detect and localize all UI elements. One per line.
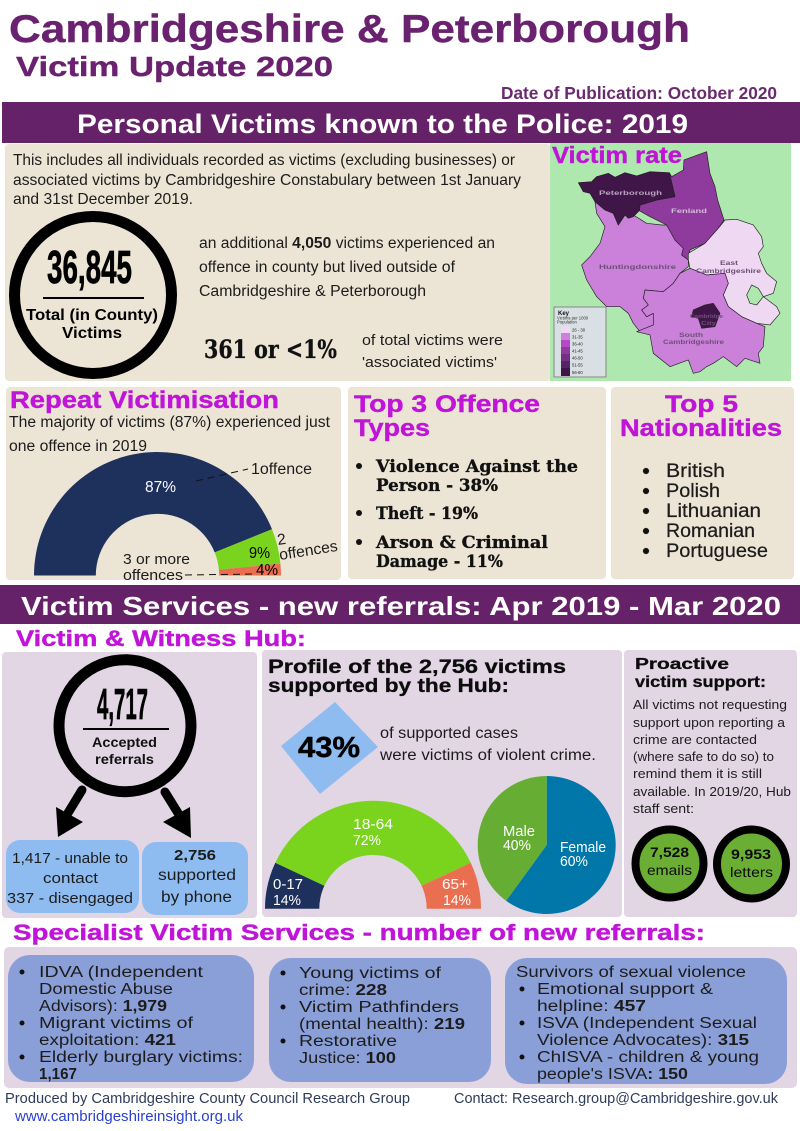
associated victims stat: 361 or <1% [204, 335, 337, 364]
box: young victims and pathfinders [269, 958, 491, 1082]
map key: 31-35 [572, 334, 583, 340]
proactive text: support upon reporting a [633, 716, 785, 730]
banner: personal victims [2, 102, 800, 143]
proactive text: crime are contacted [633, 733, 757, 747]
age half-donut chart: 18-64 [353, 817, 393, 833]
top 3 heading: Top 3 Offence [354, 391, 540, 418]
gender pie chart [478, 776, 616, 914]
intro text: This includes all individuals recorded as victims (excluding businesses) or [13, 152, 516, 169]
additional victims text: an additional 4,050 victims experienced an [199, 235, 495, 252]
box: domestic abuse and exploitation: Advisors): 1,979 [39, 998, 167, 1015]
title block: Victim Update 2020 [16, 51, 333, 82]
map labels: Cambridgeshire [663, 339, 724, 346]
offence list [356, 457, 578, 572]
age half-donut chart: 14% [443, 893, 471, 909]
box: domestic abuse and exploitation: Domestic Abuse [39, 981, 173, 998]
nationalities heading [620, 391, 782, 442]
panel: personal victims summary [5, 144, 551, 381]
intro text [13, 152, 521, 208]
associated victims stat: of total victims were [362, 332, 503, 349]
box: domestic abuse and exploitation: exploitation: 421 [39, 1032, 176, 1049]
total victims ring: Victims [62, 325, 122, 342]
map labels: Cambridgeshire [696, 268, 761, 275]
repeat victimisation text [9, 414, 331, 455]
callout: unable to contact: 1,417 - unable to [12, 850, 128, 867]
callout: supported by phone [142, 842, 248, 915]
map key: 56-60 [572, 370, 583, 375]
proactive text: available. In 2019/20, Hub [633, 785, 791, 799]
letters count: letters [730, 864, 773, 880]
box: survivors of sexual violence: Emotional support & [537, 981, 714, 998]
panel: proactive victim support [624, 650, 797, 917]
top 3 heading: Types [354, 415, 430, 442]
map key: Key [558, 311, 570, 317]
map key: Population [557, 320, 577, 324]
box: domestic abuse and exploitation: IDVA (Independent [39, 964, 204, 981]
repeat victimisation heading: Repeat Victimisation [10, 387, 279, 414]
repeat victimisation text: The majority of victims (87%) experienced just [9, 414, 331, 431]
age half-donut chart: 14% [273, 893, 301, 909]
offence list: Damage - 11% [376, 552, 503, 572]
nationalities list: Romanian [666, 520, 755, 542]
box: young victims and pathfinders: Restorative [299, 1033, 397, 1050]
half-donut chart: offence counts: offences [278, 538, 339, 564]
violent crime stat: of supported cases [380, 725, 518, 742]
half-donut chart: offence counts [34, 452, 339, 584]
intro text: and 31st December 2019. [13, 191, 193, 208]
map labels: Huntingdonshire [599, 264, 677, 271]
nationalities list: Portuguese [666, 540, 768, 562]
callout: unable to contact [6, 840, 139, 913]
profile heading: supported by the Hub: [268, 676, 509, 697]
nationalities list: British [666, 460, 725, 482]
arrow: to unable to contact [56, 790, 83, 837]
panel: profile of supported victims [262, 650, 622, 917]
heading: victim and witness hub: Victim & Witness Hub: [16, 626, 306, 651]
half-donut chart: offence counts: 1offence [251, 461, 312, 478]
intro text: associated victims by Cambridgeshire Constabulary between 1st January [13, 172, 521, 189]
nationalities heading: Nationalities [620, 415, 782, 442]
proactive text: (where safe to do so) to [633, 750, 774, 764]
top 3 heading [354, 391, 540, 442]
panel: repeat victimisation [6, 387, 341, 584]
victim rate heading: Victim rate [552, 142, 682, 168]
violent crime stat: were victims of violent crime. [379, 747, 596, 764]
emails count [636, 830, 704, 898]
proactive heading: Proactive [635, 656, 729, 673]
map key: 46-50 [572, 356, 583, 360]
box: young victims and pathfinders: crime: 228 [299, 982, 387, 999]
banner: victim services [0, 585, 800, 624]
half-donut chart: offence counts: 3 or more [123, 551, 190, 568]
associated victims stat [204, 332, 503, 371]
box: survivors of sexual violence: helpline: 457 [537, 998, 646, 1015]
box: young victims and pathfinders: Young victims of [299, 965, 442, 982]
age half-donut chart: 0-17 [273, 877, 303, 893]
box: domestic abuse and exploitation: 1,167 [39, 1066, 77, 1083]
title block: Cambridgeshire & Peterborough [9, 8, 690, 51]
total victims ring: Total (in County) [26, 307, 158, 324]
panel: specialist services [4, 947, 797, 1088]
panel: top 5 nationalities [611, 387, 794, 579]
age half-donut chart: 65+ [442, 877, 468, 893]
box: survivors of sexual violence: ISVA (Independent Sexual [537, 1015, 757, 1032]
footer: Contact: Research.group@Cambridgeshire.gov.uk [454, 1091, 779, 1107]
half-donut chart: offence counts: 4% [256, 562, 278, 579]
banner: personal victims: Personal Victims known to the Police: 2019 [77, 109, 688, 139]
nationalities heading: Top 5 [665, 391, 738, 418]
gender pie chart: 60% [560, 854, 588, 870]
panel: top 3 offence types [348, 387, 606, 579]
footer: www.cambridgeshireinsight.org.uk [14, 1109, 244, 1125]
box: young victims and pathfinders: (mental health): 219 [299, 1016, 465, 1033]
emails count: 7,528 [650, 844, 689, 860]
map labels: Cambridge [690, 314, 723, 320]
heading: specialist victim services: Specialist Victim Services - number of new referrals: [13, 920, 705, 945]
accepted referrals ring: 4,717 [97, 680, 148, 729]
letters count [717, 830, 786, 898]
box: survivors of sexual violence: ChISVA - children & young [537, 1049, 759, 1066]
map labels: Fenland [671, 208, 707, 215]
footer: Produced by Cambridgeshire County Council Research Group [5, 1091, 410, 1107]
additional victims text: Cambridgeshire & Peterborough [199, 283, 426, 300]
panel: hub referrals [2, 652, 257, 918]
box: survivors of sexual violence: Survivors of sexual violence [516, 964, 746, 981]
box: domestic abuse and exploitation [8, 955, 254, 1083]
age half-donut chart [265, 801, 481, 909]
associated victims stat: 'associated victims' [362, 354, 497, 371]
callout: supported by phone: by phone [161, 889, 232, 906]
gender pie chart: Male [503, 824, 535, 840]
banner: victim services: Victim Services - new referrals: Apr 2019 - Mar 2020 [21, 591, 781, 621]
box: domestic abuse and exploitation: Elderly burglary victims: [39, 1049, 243, 1066]
offence list: Arson & Criminal [375, 533, 549, 553]
footer [5, 1091, 779, 1125]
map key: 51-55 [572, 362, 583, 368]
profile heading [268, 657, 566, 697]
map labels: City [701, 321, 717, 327]
map key: 26 - 30 [572, 328, 586, 332]
callout: unable to contact: contact [43, 870, 99, 887]
proactive text: All victims not requesting [633, 698, 787, 712]
callout: unable to contact: 337 - disengaged [7, 890, 133, 907]
publication date: Date of Publication: October 2020 [501, 83, 777, 103]
map key: Victims per 1000 [557, 316, 589, 320]
map key: 41-45 [572, 348, 583, 354]
total victims ring: 36,845 [47, 241, 132, 293]
additional victims text [199, 235, 495, 300]
title block [9, 8, 690, 82]
nationalities list: Lithuanian [666, 500, 761, 522]
map labels: South [679, 332, 703, 339]
gender pie chart: Female [560, 840, 606, 856]
accepted referrals ring: referrals [95, 751, 154, 767]
violent crime stat [281, 702, 596, 794]
panel: victim rate map [550, 142, 791, 381]
box: survivors of sexual violence: people's ISVA : 150 [537, 1066, 688, 1083]
nationalities list: Polish [666, 480, 720, 502]
proactive text: remind them it is still [633, 767, 762, 781]
profile heading: Profile of the 2,756 victims [268, 657, 566, 678]
half-donut chart: offence counts: 87% [145, 479, 176, 496]
violent crime stat: 43% [298, 732, 360, 764]
proactive heading: victim support: [635, 674, 766, 691]
offence list: Theft - 19% [376, 504, 478, 524]
repeat victimisation text: one offence in 2019 [9, 438, 147, 455]
box: young victims and pathfinders: Justice: 100 [299, 1050, 396, 1067]
map labels [599, 190, 761, 346]
nationalities list [643, 460, 768, 562]
box: young victims and pathfinders: Victim Pathfinders [299, 999, 459, 1016]
proactive text [633, 698, 791, 816]
half-donut chart: offence counts: 9% [249, 545, 270, 562]
half-donut chart: offence counts: offences [123, 567, 183, 584]
total victims ring [14, 216, 172, 374]
additional victims text: offence in county but lived outside of [199, 259, 456, 276]
offence list: Person - 38% [376, 476, 498, 496]
map labels: East [720, 260, 739, 267]
map key [554, 307, 606, 377]
age half-donut chart: 72% [353, 833, 381, 849]
map labels: Peterborough [599, 190, 662, 197]
map key: 36-40 [572, 342, 583, 346]
callout: supported by phone: 2,756 [174, 847, 216, 864]
map of districts [578, 152, 780, 373]
arrow: to supported by phone [163, 792, 191, 838]
letters count: 9,953 [731, 846, 771, 862]
box: domestic abuse and exploitation: Migrant victims of [39, 1015, 194, 1032]
emails count: emails [647, 862, 692, 878]
callout: supported by phone: supported [158, 867, 236, 884]
box: survivors of sexual violence [505, 958, 787, 1084]
gender pie chart: 40% [503, 838, 531, 854]
box: survivors of sexual violence: Violence Advocates): 315 [537, 1032, 749, 1049]
accepted referrals ring [59, 660, 191, 792]
offence list: Violence Against the [375, 457, 578, 477]
proactive heading [635, 656, 766, 691]
half-donut chart: offence counts: 2 [276, 531, 287, 549]
proactive text: staff sent: [633, 802, 694, 816]
accepted referrals ring: Accepted [92, 734, 157, 750]
